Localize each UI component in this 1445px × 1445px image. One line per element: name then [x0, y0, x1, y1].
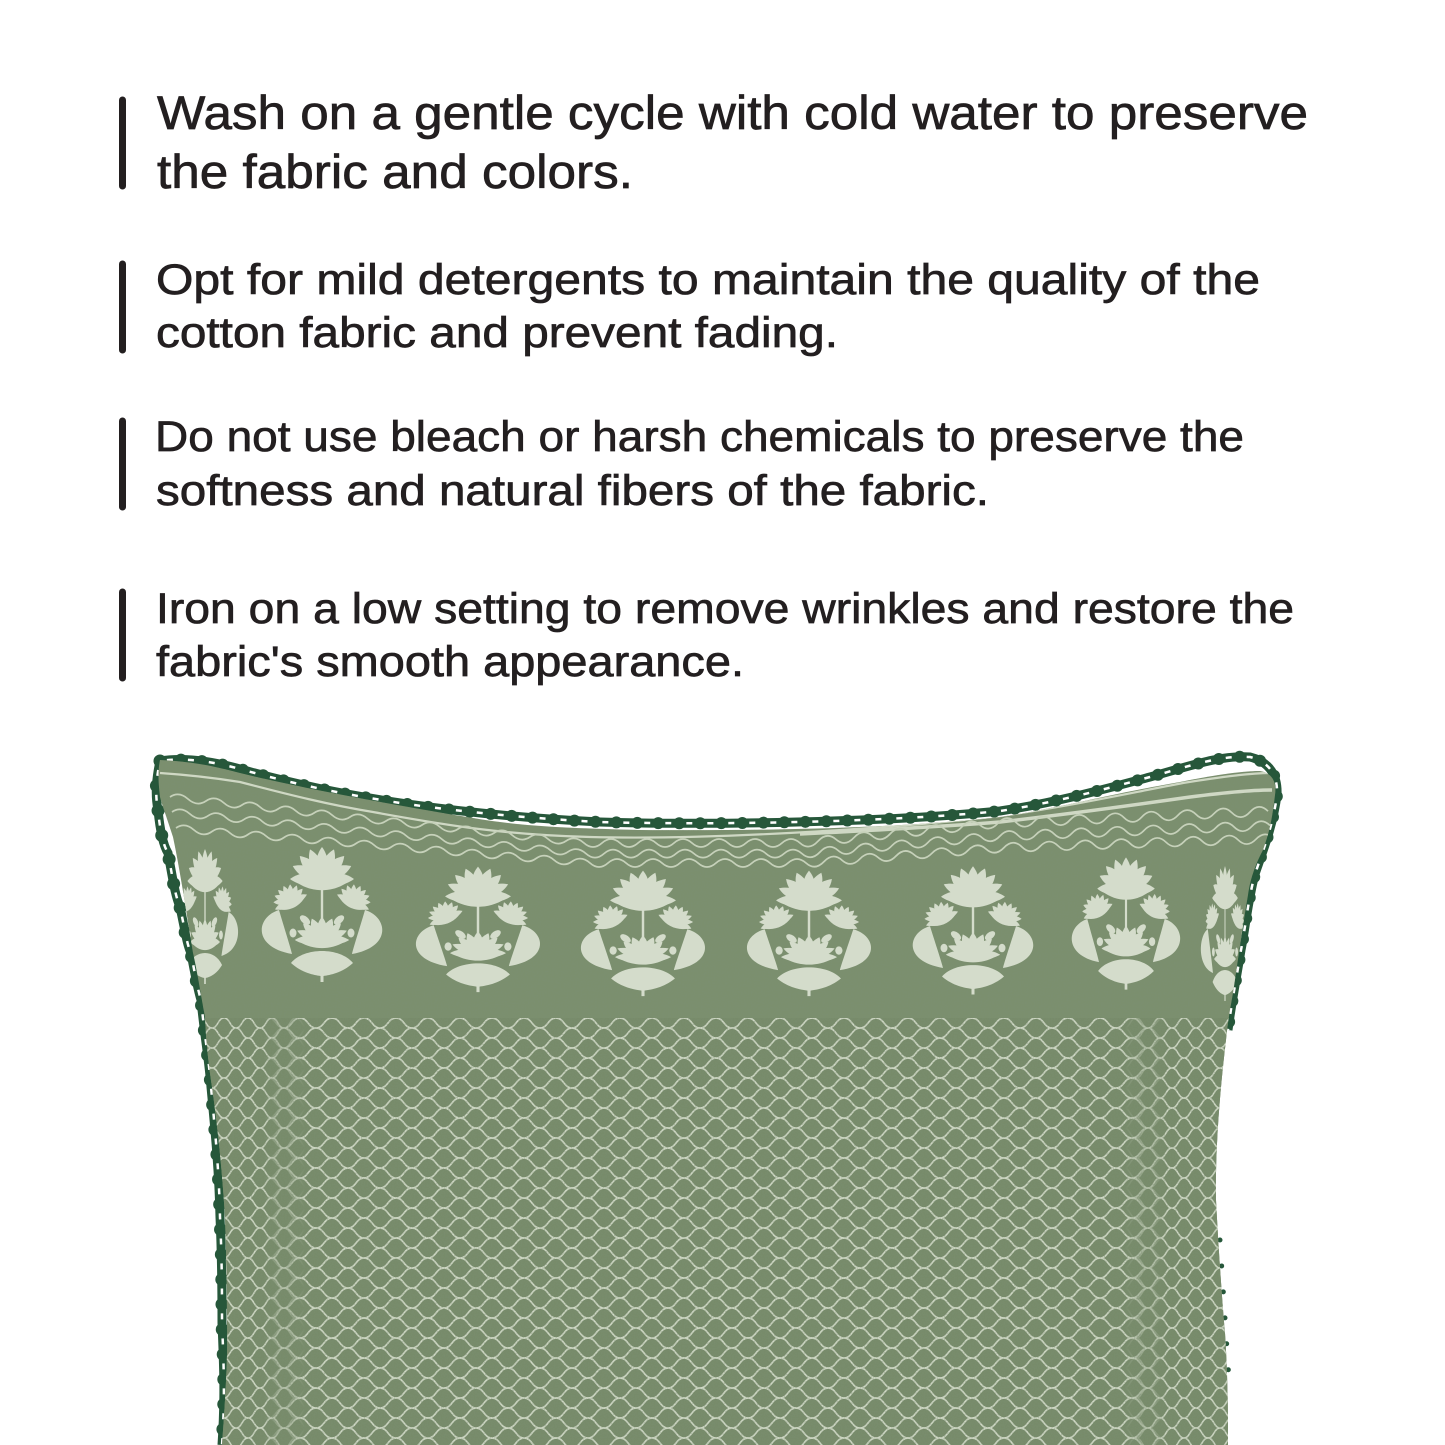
motif: flower 5	[913, 866, 1033, 995]
motif: flower 1	[262, 847, 382, 982]
care instruction 1: cold wash	[122, 86, 1308, 198]
motif: flower 6	[1072, 857, 1180, 990]
motif: partial left flower	[184, 849, 238, 984]
care text 4: Iron on a low setting to remove wrinkles and restore the	[156, 585, 1294, 633]
care text 3: softness and natural fibers of the fabric.	[156, 467, 989, 515]
motif: flower 3	[581, 871, 705, 996]
care instruction 2: mild detergents	[122, 256, 1260, 357]
care text 2	[156, 256, 1260, 357]
wavy woven lines	[170, 794, 1274, 867]
care text 3: Do not use bleach or harsh chemicals to preserve the	[155, 413, 1244, 461]
care text 1: the fabric and colors.	[157, 145, 633, 198]
lattice weave panel	[190, 1018, 1240, 1445]
care text 4	[156, 585, 1294, 686]
motif: partial right flower	[1201, 866, 1249, 1001]
motif: flower 2	[416, 867, 540, 992]
care text 1	[157, 86, 1308, 198]
pillow fabric body	[140, 740, 1300, 1445]
lace trim	[156, 757, 1277, 1445]
care instruction 3: no bleach	[122, 413, 1244, 515]
divider bar 2	[119, 264, 126, 350]
care text 2: Opt for mild detergents to maintain the quality of the	[156, 256, 1260, 304]
divider bar 4	[119, 592, 126, 678]
care text 2: cotton fabric and prevent fading.	[156, 309, 838, 357]
woven stripes at top edge	[160, 773, 1272, 838]
floral motif row	[172, 847, 1249, 1001]
care text 1: Wash on a gentle cycle with cold water to preserve	[157, 86, 1308, 139]
care text 4: fabric's smooth appearance.	[156, 638, 744, 686]
divider bar 1	[119, 100, 126, 186]
divider bar 3	[119, 421, 126, 507]
care instruction 4: low iron	[122, 585, 1294, 686]
fabric texture	[140, 740, 1300, 1445]
motif: flower 4	[747, 871, 871, 996]
care text 3	[155, 413, 1244, 515]
pillow illustration	[140, 740, 1300, 1445]
